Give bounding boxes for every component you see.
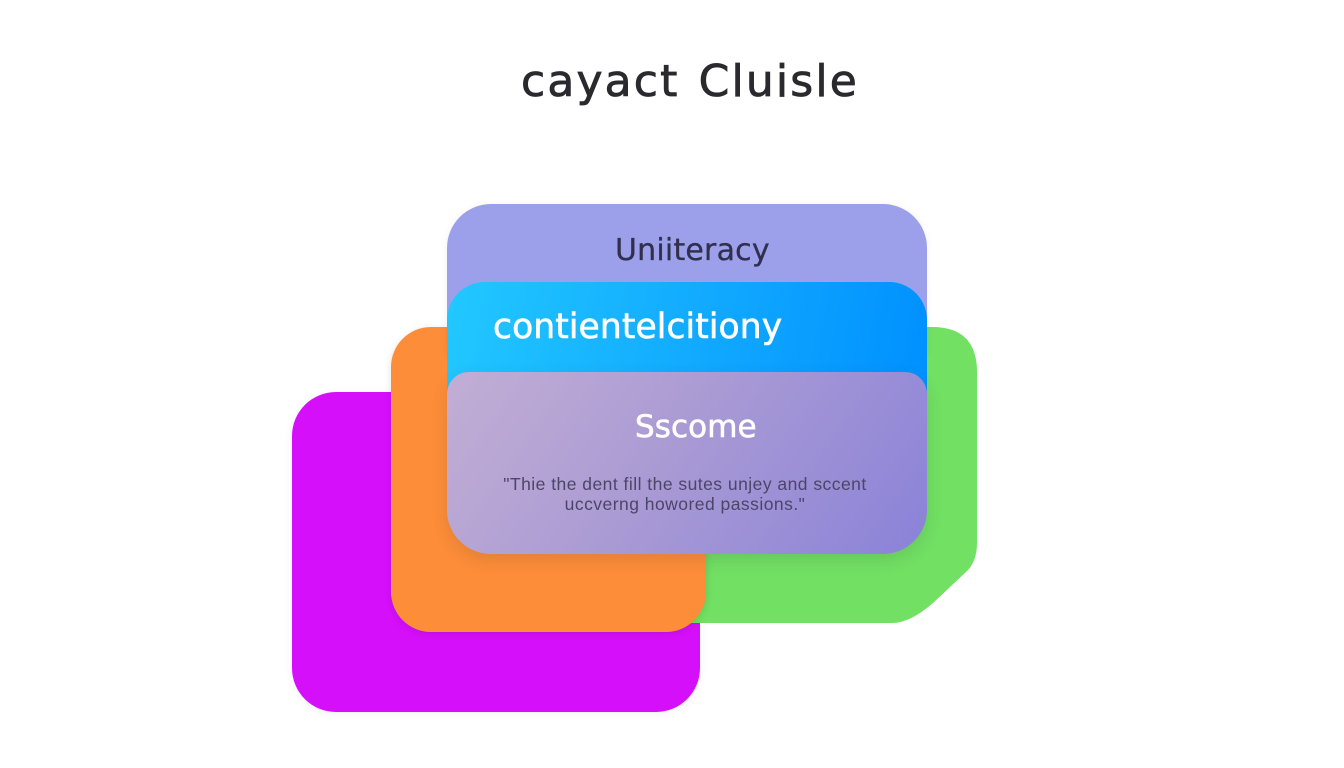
card: magenta: [292, 392, 700, 712]
card: orange: [391, 327, 706, 632]
card: lavender: [447, 204, 927, 354]
card label: contientelcitiony: contientelcitiony: [493, 307, 782, 347]
quote text: [503, 474, 867, 514]
layered card diagram: [292, 204, 977, 712]
title: cayact Cluisle: [521, 56, 859, 107]
card: blue: [447, 282, 927, 394]
card heading: Sscome: Sscome: [635, 409, 757, 445]
quote text: uccverng howored passions.": [565, 494, 805, 514]
quote text: "Thie the dent fill the sutes unjey and sccent: [503, 474, 867, 494]
card: green with clipped corner: [691, 327, 977, 623]
card label: Uniiteracy: Uniiteracy: [615, 233, 770, 268]
card: translucent purple: [447, 372, 927, 554]
